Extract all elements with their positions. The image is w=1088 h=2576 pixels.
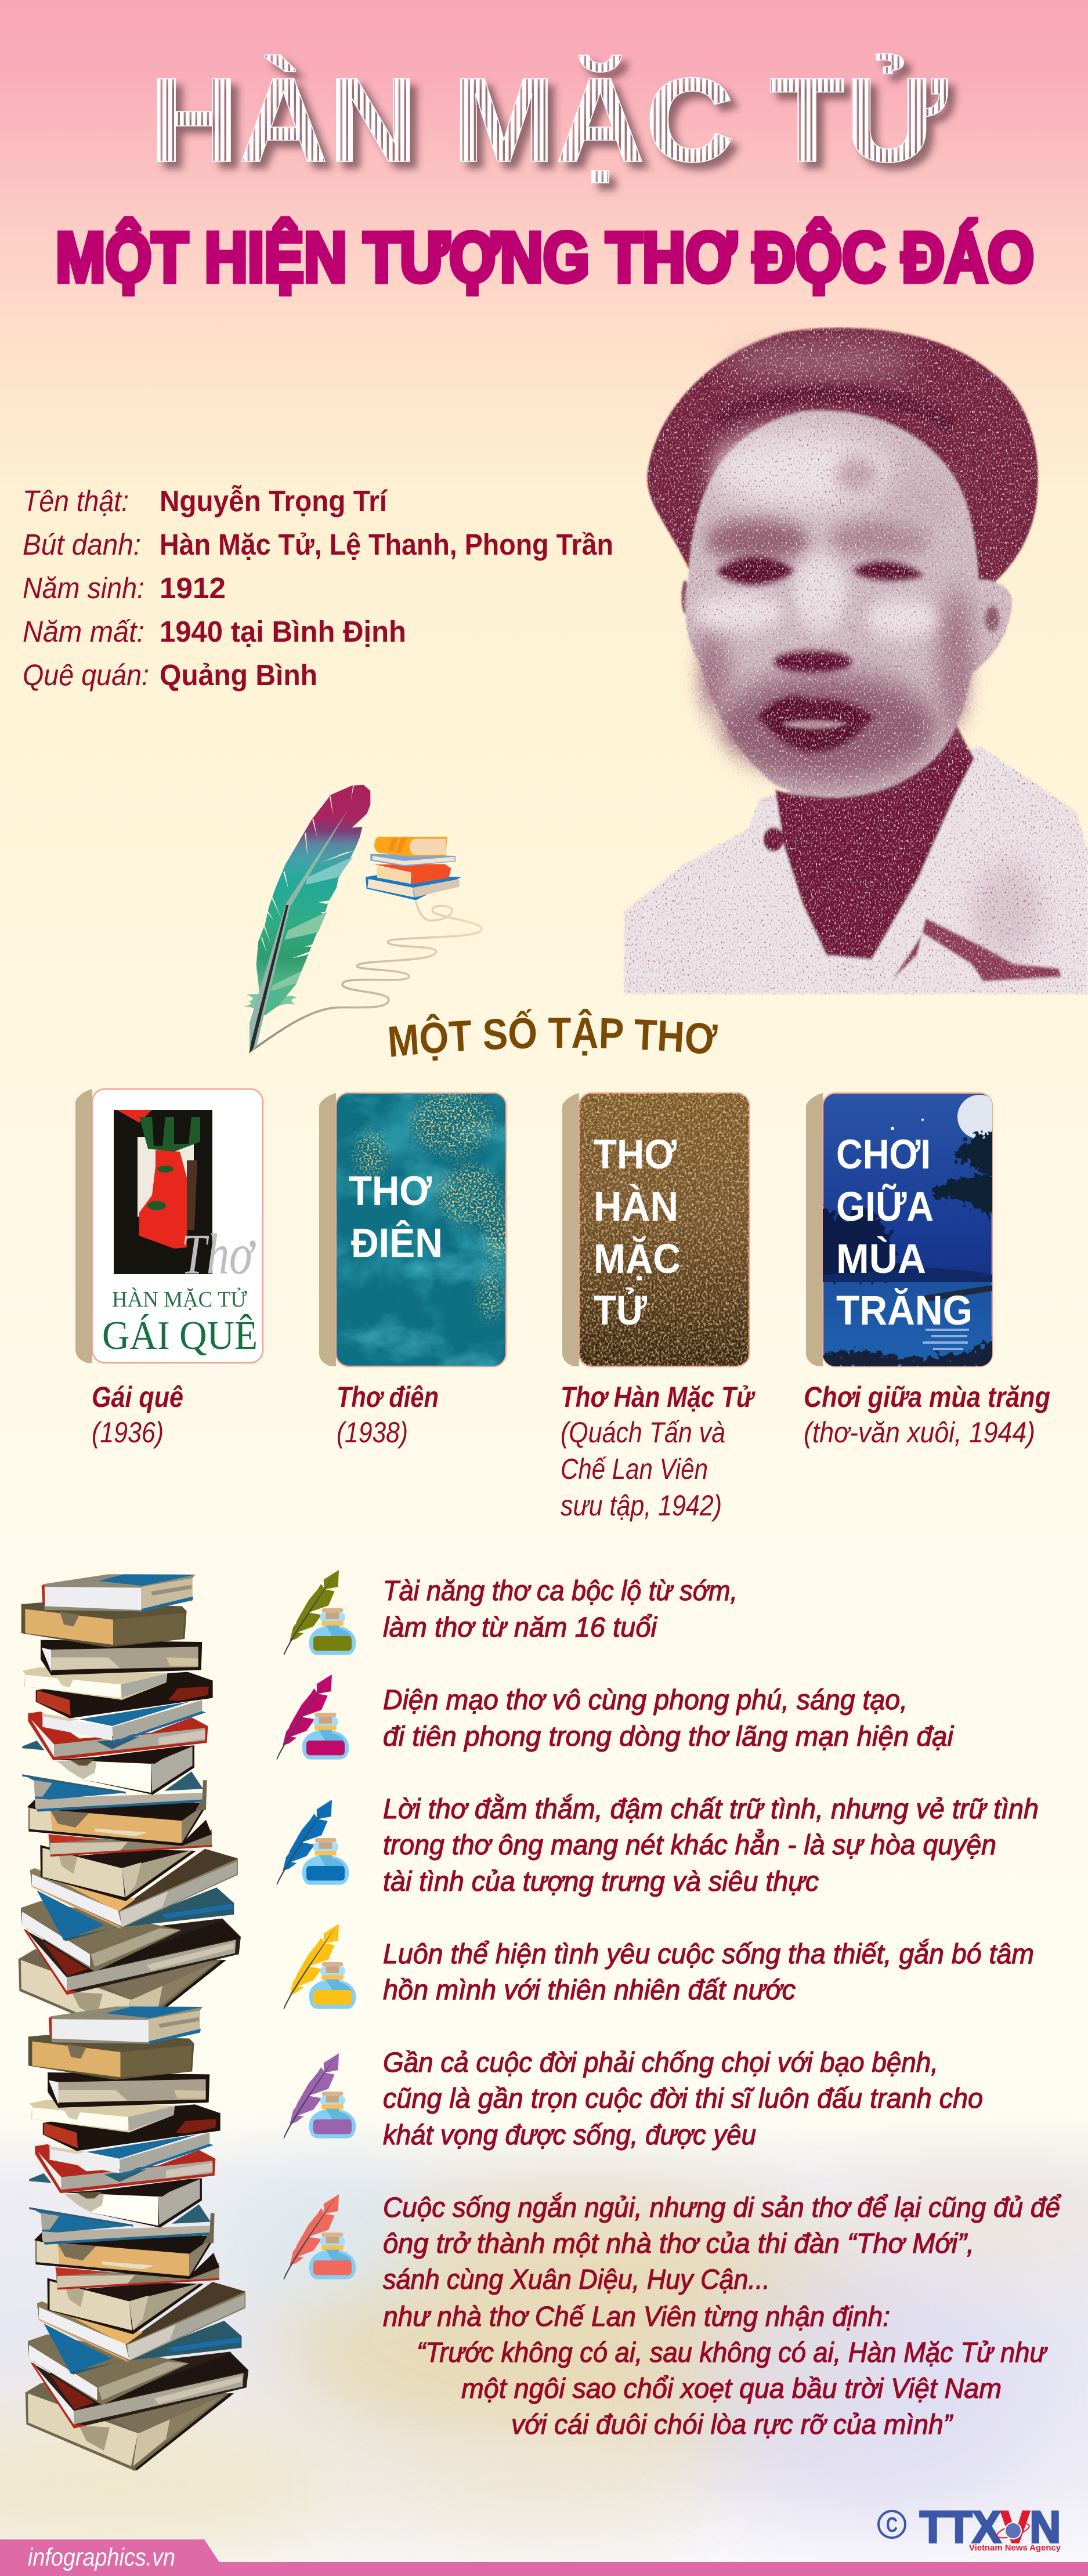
- info: Năm mất: [23, 615, 406, 648]
- title: HÀN MẶC TỬ: HÀN MẶC TỬ: [149, 53, 948, 187]
- portrait: [624, 327, 1088, 994]
- cover title: ĐIÊN: [351, 1220, 443, 1267]
- ribbon: [251, 901, 482, 1051]
- text: item 6: một ngôi sao chổi xoẹt qua bầu trời Việt Nam: [461, 2374, 1002, 2404]
- icon: coral quill: [283, 2194, 356, 2280]
- night scene: [818, 1095, 1002, 1369]
- small books: [366, 837, 461, 900]
- cover title: MẶC: [594, 1236, 681, 1282]
- portrait: ear right: [968, 580, 1013, 676]
- text: item 5: khát vọng được sống, được yêu: [383, 2120, 756, 2151]
- caption: Thơ điên: [337, 1381, 439, 1449]
- feather fluff: [244, 994, 297, 1014]
- text: item 3: [383, 1794, 1039, 1897]
- text: item 4: Luôn thể hiện tình yêu cuộc sống tha thiết, gắn bó tâm: [383, 1939, 1034, 1970]
- portrait: face: [685, 411, 979, 798]
- info: Năm sinh: 1912: [160, 571, 226, 605]
- icon: crimson quill: [276, 1674, 349, 1760]
- feather light bands: [284, 912, 327, 940]
- text: item 3: Lời thơ đằm thắm, đậm chất trữ tình, nhưng vẻ trữ tình: [383, 1794, 1039, 1825]
- text: item 6: với cái đuôi chói lòa rực rỡ của mình”: [511, 2409, 953, 2440]
- portrait: jaw shading: [715, 674, 938, 783]
- cover title: GÁI QUÊ: [102, 1314, 258, 1358]
- agency name: Vietnam News Agency: [969, 2543, 1061, 2553]
- icon: olive quill: [283, 1570, 356, 1655]
- feather splits: [261, 785, 370, 958]
- book: Gái quê: [75, 1089, 263, 1363]
- cover script: Thơ: [181, 1222, 256, 1286]
- text: item 1: Tài năng thơ ca bộc lộ từ sớm,: [383, 1576, 738, 1607]
- feather vane: [256, 785, 370, 1015]
- wordmark: TTXVN: [920, 2502, 1061, 2552]
- caption: Thơ Hàn Mặc Tử: Chế Lan Viên: [561, 1453, 708, 1485]
- caption: Gái quê: [92, 1381, 183, 1449]
- caption: Thơ điên: (1938): [337, 1416, 408, 1449]
- text: item 6: như nhà thơ Chế Lan Viên từng nhận định:: [383, 2302, 890, 2332]
- cover title: [594, 1132, 681, 1334]
- caption: Gái quê: Gái quê: [92, 1381, 183, 1413]
- info: Quê quán: Quê quán:: [23, 659, 149, 692]
- text: item 6: [383, 2193, 1061, 2440]
- book stack: upper: [19, 1574, 241, 2038]
- footer bar: [0, 2539, 1088, 2576]
- cover title: CHƠI: [836, 1132, 931, 1178]
- caption: Thơ Hàn Mặc Tử: Thơ Hàn Mặc Tử: [561, 1381, 756, 1413]
- book: Thơ điên: [319, 1091, 514, 1366]
- portrait: ear left: [681, 580, 689, 614]
- icon: yellow quill: [283, 1924, 356, 2009]
- globe: [996, 2520, 1031, 2541]
- text: item 5: [383, 2047, 983, 2151]
- text: item 6: ông trở thành một nhà thơ của thi đàn “Thơ Mới”,: [383, 2228, 974, 2259]
- text: item 6: sánh cùng Xuân Diệu, Huy Cận...: [383, 2264, 770, 2295]
- info: Năm mất: Năm mất:: [23, 615, 144, 648]
- portrait: collar crease: [892, 918, 1062, 981]
- text: item 5: Gần cả cuộc đời phải chống chọi với bạo bệnh,: [383, 2047, 938, 2078]
- info: Bút danh: Hàn Mặc Tử, Lệ Thanh, Phong Trần: [160, 528, 613, 561]
- spine: [806, 1093, 823, 1366]
- spine: [562, 1093, 579, 1366]
- text: item 1: [383, 1576, 738, 1643]
- portrait: collar button: [763, 827, 784, 852]
- caption: Gái quê: (1936): [92, 1416, 164, 1449]
- cover: [92, 1089, 263, 1363]
- cover title: TỬ: [594, 1287, 647, 1334]
- portrait: forehead light: [711, 431, 892, 510]
- info: Năm sinh: Năm sinh:: [23, 571, 144, 605]
- text: item 4: [383, 1939, 1034, 2006]
- text: item 4: hồn mình với thiên nhiên đất nước: [383, 1975, 796, 2006]
- background: misty bottom texture: [0, 2112, 1088, 2576]
- cover: [579, 1093, 749, 1366]
- copyright mark: C: [886, 2513, 898, 2537]
- cover title: [349, 1175, 440, 1257]
- portrait: nose: [773, 651, 852, 672]
- info: Tên thật: Tên thật:: [23, 484, 129, 518]
- text: item 2: Diện mạo thơ vô cùng phong phú, sáng tạo,: [383, 1685, 908, 1716]
- info: Quê quán: [23, 659, 317, 692]
- heading: Một số tập thơ: MỘT SỐ TẬP THƠ: [389, 1008, 718, 1061]
- cover title: HÀN: [594, 1184, 678, 1230]
- icon: blue quill: [276, 1800, 349, 1885]
- text: item 5: cũng là gần trọn cuộc đời thi sĩ luôn đấu tranh cho: [383, 2083, 983, 2114]
- text: item 1: làm thơ từ năm 16 tuổi: [383, 1612, 657, 1643]
- feather shaft: [250, 809, 348, 1053]
- footer text: infographics.vn: [28, 2544, 175, 2571]
- info: Tên thật: Nguyễn Trọng Trí: [160, 484, 388, 518]
- book stack: lower: [26, 2006, 248, 2471]
- cover painting: [114, 1110, 212, 1274]
- icon: quill with ribbon and books: [244, 785, 482, 1054]
- caption: Chơi giữa mùa trăng: (thơ-văn xuôi, 1944): [804, 1416, 1035, 1449]
- text: item 2: [383, 1685, 954, 1752]
- cover title: TRĂNG: [836, 1288, 973, 1334]
- icon: purple quill: [283, 2053, 356, 2139]
- caption: Thơ Hàn Mặc Tử: (Quách Tấn và: [561, 1416, 725, 1449]
- portrait: neck opening: [775, 723, 974, 960]
- info: Tên thật: [23, 484, 388, 518]
- cover author: HÀN MẶC TỬ: [112, 1287, 247, 1312]
- portrait: lips: [757, 696, 874, 752]
- cover title: THƠ: [594, 1132, 677, 1178]
- leather texture: [579, 1093, 749, 1366]
- cover title: [836, 1132, 973, 1334]
- caption: Chơi giữa mùa trăng: [804, 1381, 1050, 1449]
- cover title: GIỮA: [836, 1184, 934, 1230]
- spine: [75, 1089, 92, 1363]
- text: item 6: “Trước không có ai, sau không có ai, Hàn Mặc Tử như: [417, 2338, 1048, 2368]
- book: Thơ Hàn Mặc Tử: [562, 1093, 749, 1366]
- logo: copyright and TTXVN: [879, 2502, 1061, 2553]
- caption: Thơ Hàn Mặc Tử: sưu tập, 1942): [561, 1489, 722, 1522]
- spine: [319, 1093, 336, 1366]
- text: item 2: đi tiên phong trong dòng thơ lãng mạn hiện đại: [383, 1721, 954, 1752]
- cover title: THƠ: [349, 1168, 432, 1214]
- portrait: shirt: [624, 746, 1088, 994]
- info: Bút danh: Bút danh:: [23, 528, 141, 561]
- portrait: hair: [646, 327, 1039, 593]
- text: item 6: Cuộc sống ngắn ngủi, nhưng di sản thơ để lại cũng đủ để: [383, 2193, 1061, 2223]
- caption: Chơi giữa mùa trăng: Chơi giữa mùa trăng: [804, 1381, 1050, 1413]
- text: item 3: trong thơ ông mang nét khác hẳn - là sự hòa quyện: [383, 1829, 996, 1861]
- marble texture: [336, 1091, 514, 1366]
- cover: [823, 1093, 992, 1366]
- caption: Thơ Hàn Mặc Tử: [561, 1381, 756, 1522]
- caption: Thơ điên: Thơ điên: [337, 1381, 439, 1413]
- text: item 3: tài tình của tượng trưng và siêu thực: [383, 1866, 819, 1897]
- cover title: MÙA: [836, 1236, 926, 1282]
- portrait: brow shading: [706, 519, 808, 561]
- copyright mark: [879, 2511, 905, 2538]
- info: Quê quán: Quảng Bình: [160, 659, 317, 692]
- portrait: cheeks and bridge: [693, 593, 784, 632]
- info: Năm mất: 1940 tại Bình Định: [160, 615, 406, 648]
- book: Chơi giữa mùa trăng: [806, 1093, 1002, 1369]
- info: Năm sinh: [23, 571, 226, 605]
- cover: [336, 1093, 506, 1366]
- portrait: eyes: [716, 557, 924, 585]
